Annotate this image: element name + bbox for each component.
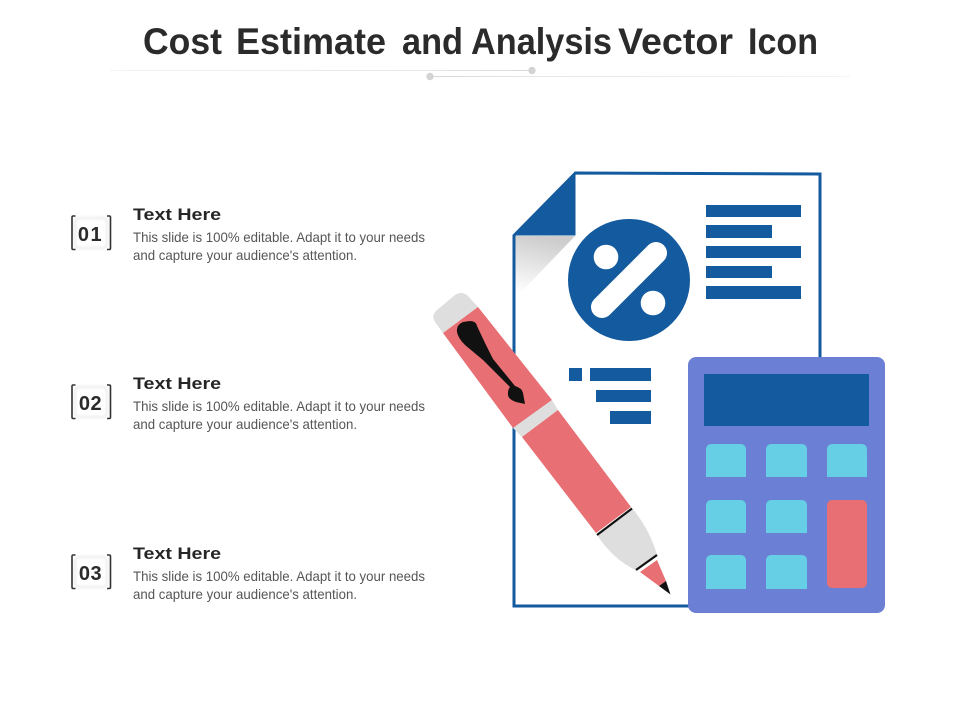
fold shadow: [516, 236, 575, 298]
badge 03: [72, 555, 110, 588]
body text 03: This slide is 100% editable. Adapt it to your needs: [133, 568, 425, 584]
body text 03: and capture your audience's attention.: [133, 586, 357, 602]
icon: calculator: [688, 357, 885, 613]
item 03: [72, 544, 425, 602]
title: Icon: [748, 21, 818, 62]
body text 02: This slide is 100% editable. Adapt it to your needs: [133, 398, 425, 414]
pen tip: [640, 560, 666, 586]
title: Analysis: [471, 21, 612, 62]
title: Estimate: [236, 21, 386, 62]
badge 01: [72, 216, 110, 250]
pen grip: [597, 508, 657, 570]
pen upper barrel: [443, 307, 552, 428]
pen ring: [513, 400, 558, 437]
item 01: [72, 205, 425, 263]
percent badge: [568, 219, 690, 341]
calculator body: [688, 357, 885, 613]
calculator screen: [704, 374, 869, 426]
badge 03: 03: [79, 563, 102, 585]
title: [143, 21, 818, 62]
text lines: upper right: [706, 205, 801, 299]
text lines: lower: [569, 368, 651, 424]
title: Vector: [618, 21, 733, 62]
body text 02: and capture your audience's attention.: [133, 416, 357, 432]
body text 01: This slide is 100% editable. Adapt it to your needs: [133, 229, 425, 245]
title: Cost: [143, 21, 222, 62]
title: and: [402, 21, 463, 62]
body text 02: [133, 398, 425, 432]
body text 01: and capture your audience's attention.: [133, 247, 357, 263]
pen clip: [457, 321, 525, 404]
folded corner: [513, 172, 576, 236]
icon: pen: [433, 293, 670, 594]
heading 03: Text Here: [133, 544, 221, 563]
heading 02: Text Here: [133, 374, 221, 393]
badge 01: 01: [78, 224, 103, 246]
pen lower barrel: [522, 410, 631, 533]
document outline: [514, 173, 820, 606]
icon: document: [513, 172, 820, 606]
pen band lines: [597, 508, 657, 570]
badge 02: 02: [79, 393, 102, 415]
pen cap end: [433, 293, 478, 333]
body text 01: [133, 229, 425, 263]
badge 02: [72, 385, 110, 418]
pen nib: [659, 581, 670, 594]
heading 01: Text Here: [133, 205, 221, 224]
calculator keys: [706, 444, 867, 589]
item 02: [72, 374, 425, 432]
body text 03: [133, 568, 425, 602]
calculator equals key: [827, 500, 867, 588]
title divider: [110, 67, 850, 80]
